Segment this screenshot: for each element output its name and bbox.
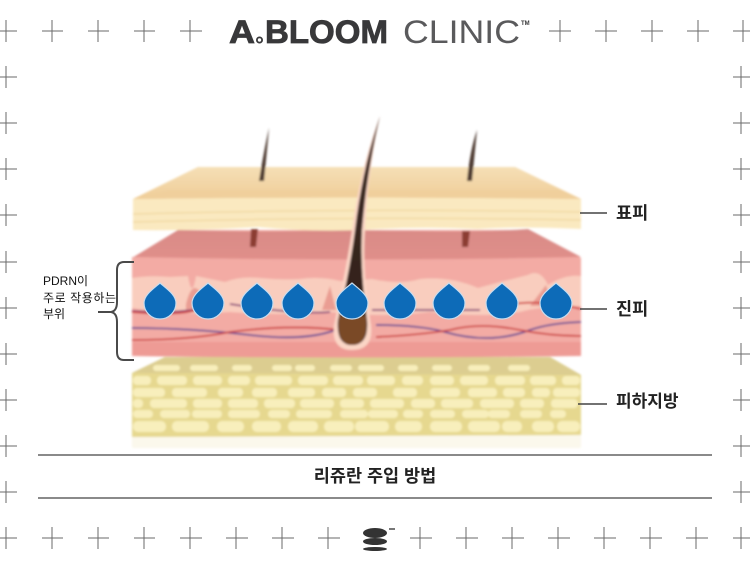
layer: dermis xyxy=(132,229,581,358)
logo: A.BLOOM CLINIC: A xyxy=(229,14,255,50)
logo: A.BLOOM CLINIC: BLOOM xyxy=(265,14,388,50)
layer: epidermis xyxy=(133,167,581,231)
label: subcutaneous fat: 피하지방 xyxy=(616,392,679,411)
label: epidermis: 표피 xyxy=(616,203,648,223)
logo: A.BLOOM CLINIC xyxy=(229,14,530,50)
icon: footer logo mark xyxy=(363,528,395,551)
layer: fat shadow xyxy=(132,435,581,448)
skin layer illustration xyxy=(132,116,581,448)
blood vessels xyxy=(132,303,581,340)
label: epidermis xyxy=(580,203,648,223)
PDRN drops xyxy=(144,283,572,319)
bracket: PDRN zone xyxy=(98,262,134,360)
logo: A.BLOOM CLINIC: CLINIC xyxy=(403,14,520,50)
label: subcutaneous fat xyxy=(578,392,679,411)
label: dermis xyxy=(580,299,648,319)
layer: subcutaneous fat xyxy=(132,357,581,437)
caption band: 리쥬란 주입 방법 xyxy=(314,466,436,486)
label: dermis: 진피 xyxy=(616,299,648,319)
callout: PDRN zone label: 부위 xyxy=(43,307,65,321)
callout: PDRN zone label: PDRN이 xyxy=(43,274,88,288)
callout: PDRN zone label: 주로 작용하는 xyxy=(43,291,116,305)
hair follicles xyxy=(250,116,477,350)
logo: A.BLOOM CLINIC: TM xyxy=(521,21,530,27)
